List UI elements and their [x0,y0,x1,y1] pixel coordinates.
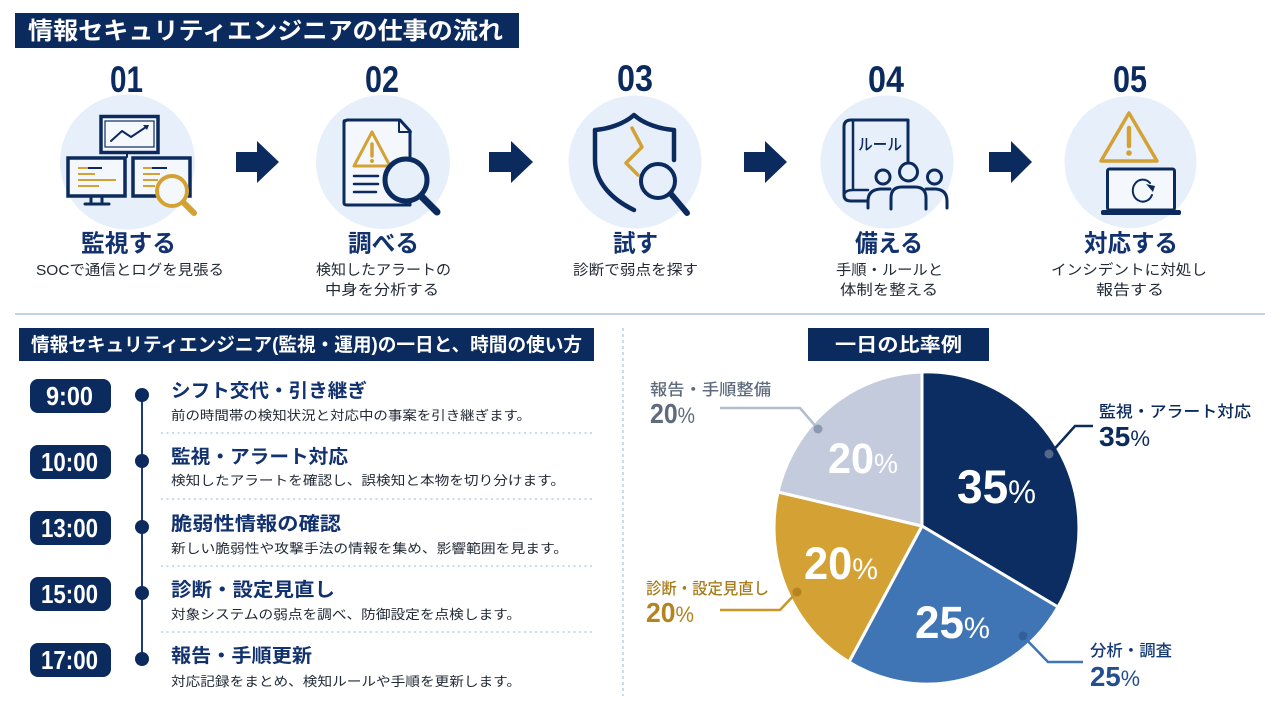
pie chart [774,372,1079,684]
step heading: 調べる: 調べる [348,230,419,258]
callout: analysis 25%: 分析・調査 [1090,642,1172,660]
step description [1051,261,1207,299]
time row 15:00: 15:00 [41,579,98,609]
time row 10:00 [30,445,565,488]
callout: reporting 20%: 20% [650,398,695,429]
step heading: 監視する: 監視する [81,230,176,258]
callout: analysis 25%: 25% [1090,661,1140,692]
step description: 手順・ルールと [836,262,943,279]
time row 10:00: 監視・アラート対応 [171,446,348,468]
pie value labels [804,435,1036,648]
schedule heading [19,328,594,361]
time row 15:00: 診断・設定見直し [171,579,335,601]
callout: monitoring 35% [1044,403,1251,458]
icon: rule book and team: ルール [858,137,902,154]
ratio heading: 一日の比率例 [835,334,962,356]
step description: 中身を分析する [325,282,439,299]
time row 17:00: 17:00 [41,645,98,675]
step description: 診断で弱点を探す [573,262,698,279]
callout: reporting 20% [650,381,822,434]
time row 17:00: 対応記録をまとめ、検知ルールや手順を更新します。 [171,674,521,689]
time row 13:00: 新しい脆弱性や攻撃手法の情報を集め、影響範囲を見ます。 [171,541,568,556]
step 01: monitor [36,59,224,279]
time row 17:00: 報告・手順更新 [171,645,312,667]
step heading: 備える: 備える [855,230,923,258]
pie value labels: 35% [957,460,1036,513]
icon: warning and laptop [1101,113,1181,215]
icon: cracked shield and magnifier [595,115,687,213]
step 05: respond: 05 [1113,59,1147,100]
time row 9:00: シフト交代・引き継ぎ [171,379,367,402]
callout: assessment 20% [646,580,802,628]
callout: monitoring 35%: 35% [1099,421,1150,452]
step description: インシデントに対処し [1051,261,1207,279]
pie value labels: 20% [804,538,878,589]
step 02: investigate: 02 [365,59,399,100]
callout: monitoring 35%: 監視・アラート対応 [1099,403,1251,421]
step 01: monitor: 01 [110,59,143,100]
arrow 1 [236,141,279,183]
step description: 体制を整える [840,282,938,299]
ratio heading [808,328,989,361]
time row 13:00 [30,511,568,556]
step description: SOCで通信とログを見張る [36,262,224,279]
step 04: prepare [820,59,954,299]
time row 13:00: 脆弱性情報の確認 [171,512,341,535]
time row 13:00: 13:00 [41,513,98,543]
callout: analysis 25% [1018,632,1172,692]
time row 15:00 [30,577,521,622]
pie value labels: 25% [915,597,990,648]
pie value labels: 20% [828,435,898,483]
callout: assessment 20%: 20% [646,597,694,628]
arrow 2 [489,141,533,183]
schedule heading: 情報セキュリティエンジニア(監視・運用)の一日と、時間の使い方 [31,333,582,356]
callout: assessment 20%: 診断・設定見直し [646,580,769,598]
time row 10:00: 10:00 [41,447,98,477]
time row 9:00 [30,379,531,423]
step description: 検知したアラートの [316,262,451,279]
callout: reporting 20%: 報告・手順整備 [650,381,771,399]
step description [316,262,451,299]
panel: daily ratio [646,328,1251,692]
arrow 3 [744,141,787,183]
time row 9:00: 前の時間帯の検知状況と対応中の事案を引き継ぎます。 [171,408,531,423]
time row 10:00: 検知したアラートを確認し、誤検知と本物を切り分けます。 [171,473,565,488]
step 05: respond [1051,59,1207,299]
timeline [135,388,149,666]
time row 9:00: 9:00 [46,381,93,411]
step 04: prepare: 04 [868,59,904,100]
icon: rule book and team [844,120,947,209]
panel: schedule [19,328,594,689]
icon: monitors and gold magnifier [68,116,194,213]
step 03: test: 03 [617,58,653,99]
time row 17:00 [30,643,521,689]
step 03: test [568,58,702,279]
step 02: investigate [316,59,451,299]
time row 15:00: 対象システムの弱点を調べ、防御設定を点検します。 [171,607,521,622]
step heading: 対応する: 対応する [1084,230,1178,258]
title banner [15,13,519,48]
step description: 報告する [1096,282,1164,299]
step heading: 試す: 試す [613,230,658,258]
title banner: 情報セキュリティエンジニアの仕事の流れ [28,18,503,45]
icon: document with warning and magnifier [344,120,437,212]
arrow 4 [989,141,1032,183]
step description [836,262,943,299]
